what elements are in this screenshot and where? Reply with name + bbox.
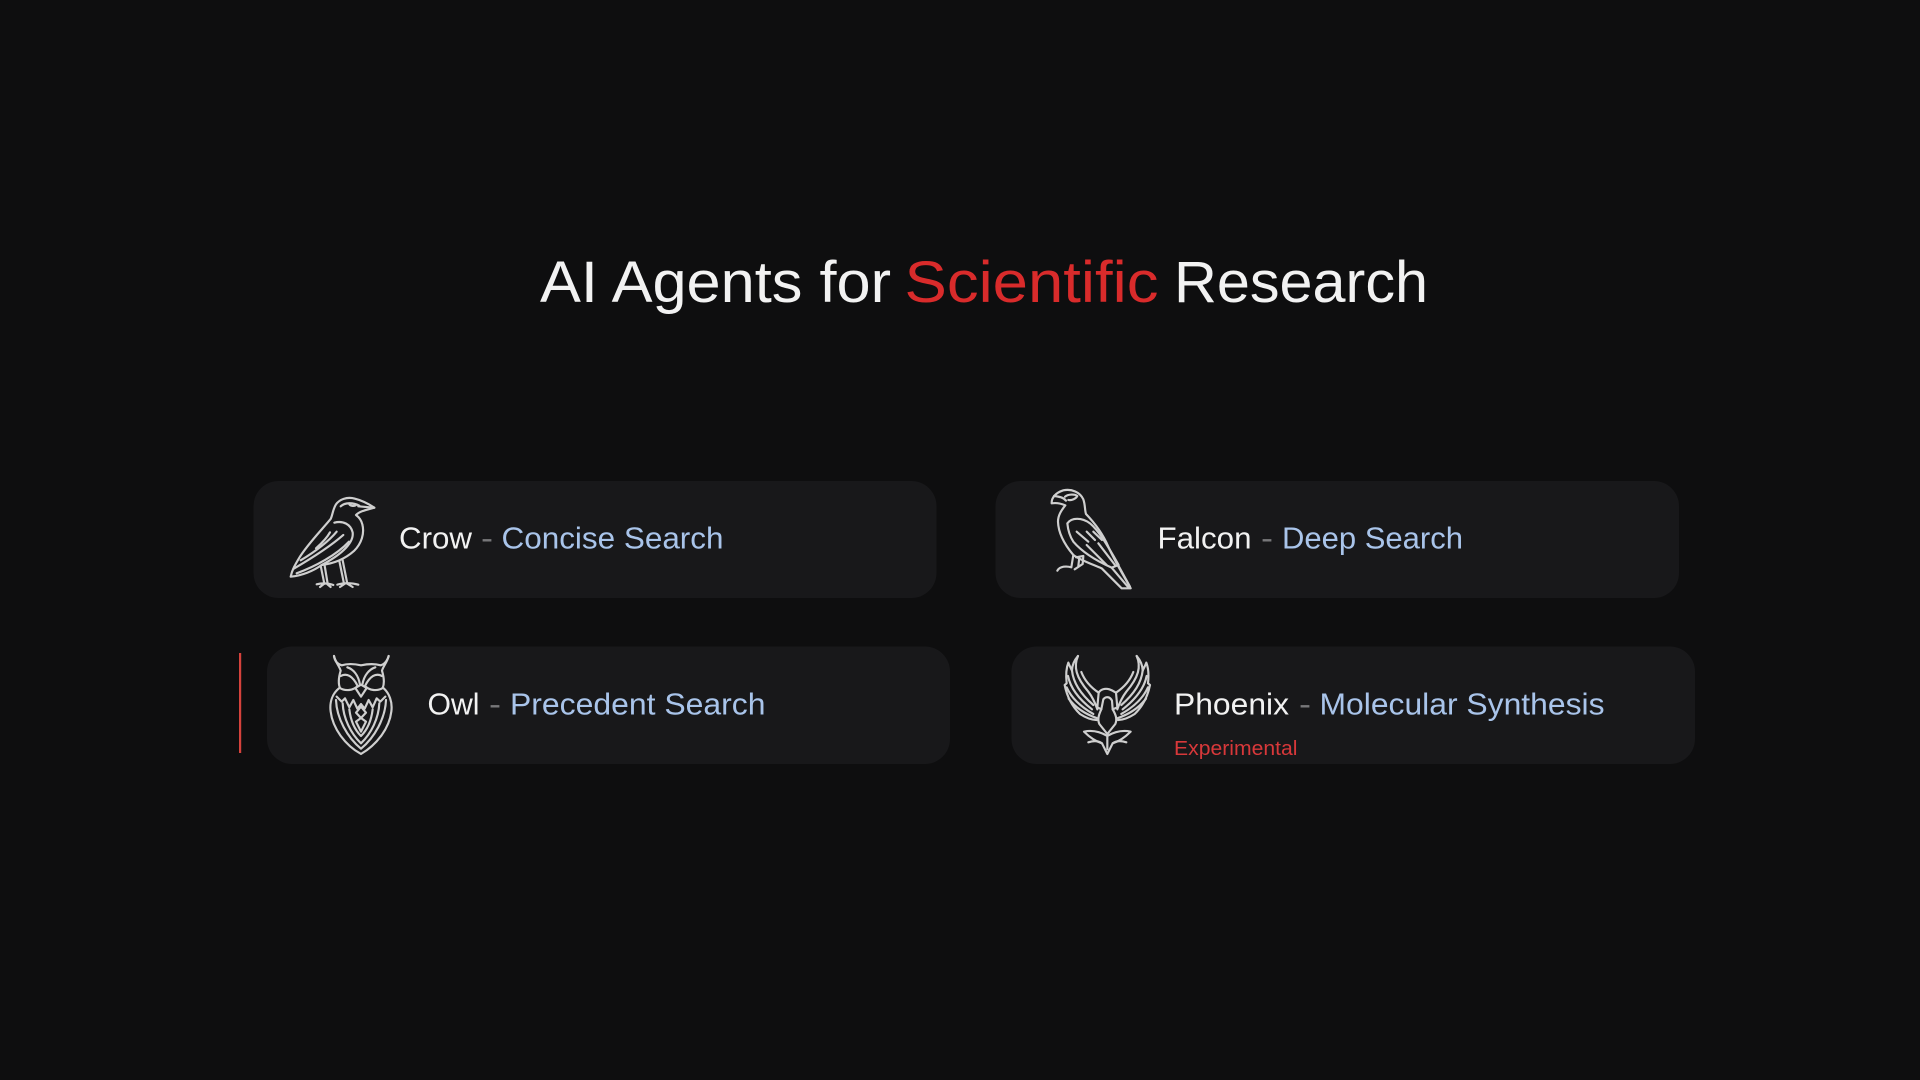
title: Scientific	[904, 250, 1158, 315]
left wing	[1065, 656, 1099, 720]
label: phoenix: -	[1299, 686, 1311, 722]
label: owl: -	[489, 686, 501, 722]
right wing	[1116, 656, 1150, 720]
icon: owl	[330, 656, 392, 754]
accent bar	[239, 653, 241, 753]
panel: crow	[254, 481, 936, 598]
label: crow: Crow	[399, 520, 473, 556]
icon: falcon	[1052, 490, 1131, 588]
label: owl: Precedent Search	[510, 686, 766, 722]
label: crow	[399, 520, 724, 556]
label: falcon: -	[1261, 520, 1273, 556]
icon: crow	[291, 498, 374, 587]
label: falcon: Falcon	[1158, 520, 1252, 556]
title: Research	[1174, 250, 1428, 315]
label: phoenix: Molecular Synthesis	[1320, 686, 1604, 722]
panel: phoenix	[1012, 646, 1695, 764]
tail	[1084, 731, 1131, 754]
panel: falcon	[996, 481, 1679, 598]
label: falcon	[1158, 520, 1463, 556]
title	[540, 250, 1428, 315]
label: crow: -	[481, 520, 493, 556]
tag: experimental: Experimental	[1174, 738, 1298, 760]
icon: phoenix	[1065, 656, 1150, 754]
title: AI Agents for	[540, 250, 891, 315]
label: owl: Owl	[428, 686, 480, 722]
label: falcon: Deep Search	[1282, 520, 1463, 556]
label: phoenix	[1174, 686, 1604, 722]
head and body	[1097, 689, 1117, 709]
label: phoenix: Phoenix	[1174, 686, 1290, 722]
label: crow: Concise Search	[502, 520, 724, 556]
panel: owl	[267, 646, 950, 764]
